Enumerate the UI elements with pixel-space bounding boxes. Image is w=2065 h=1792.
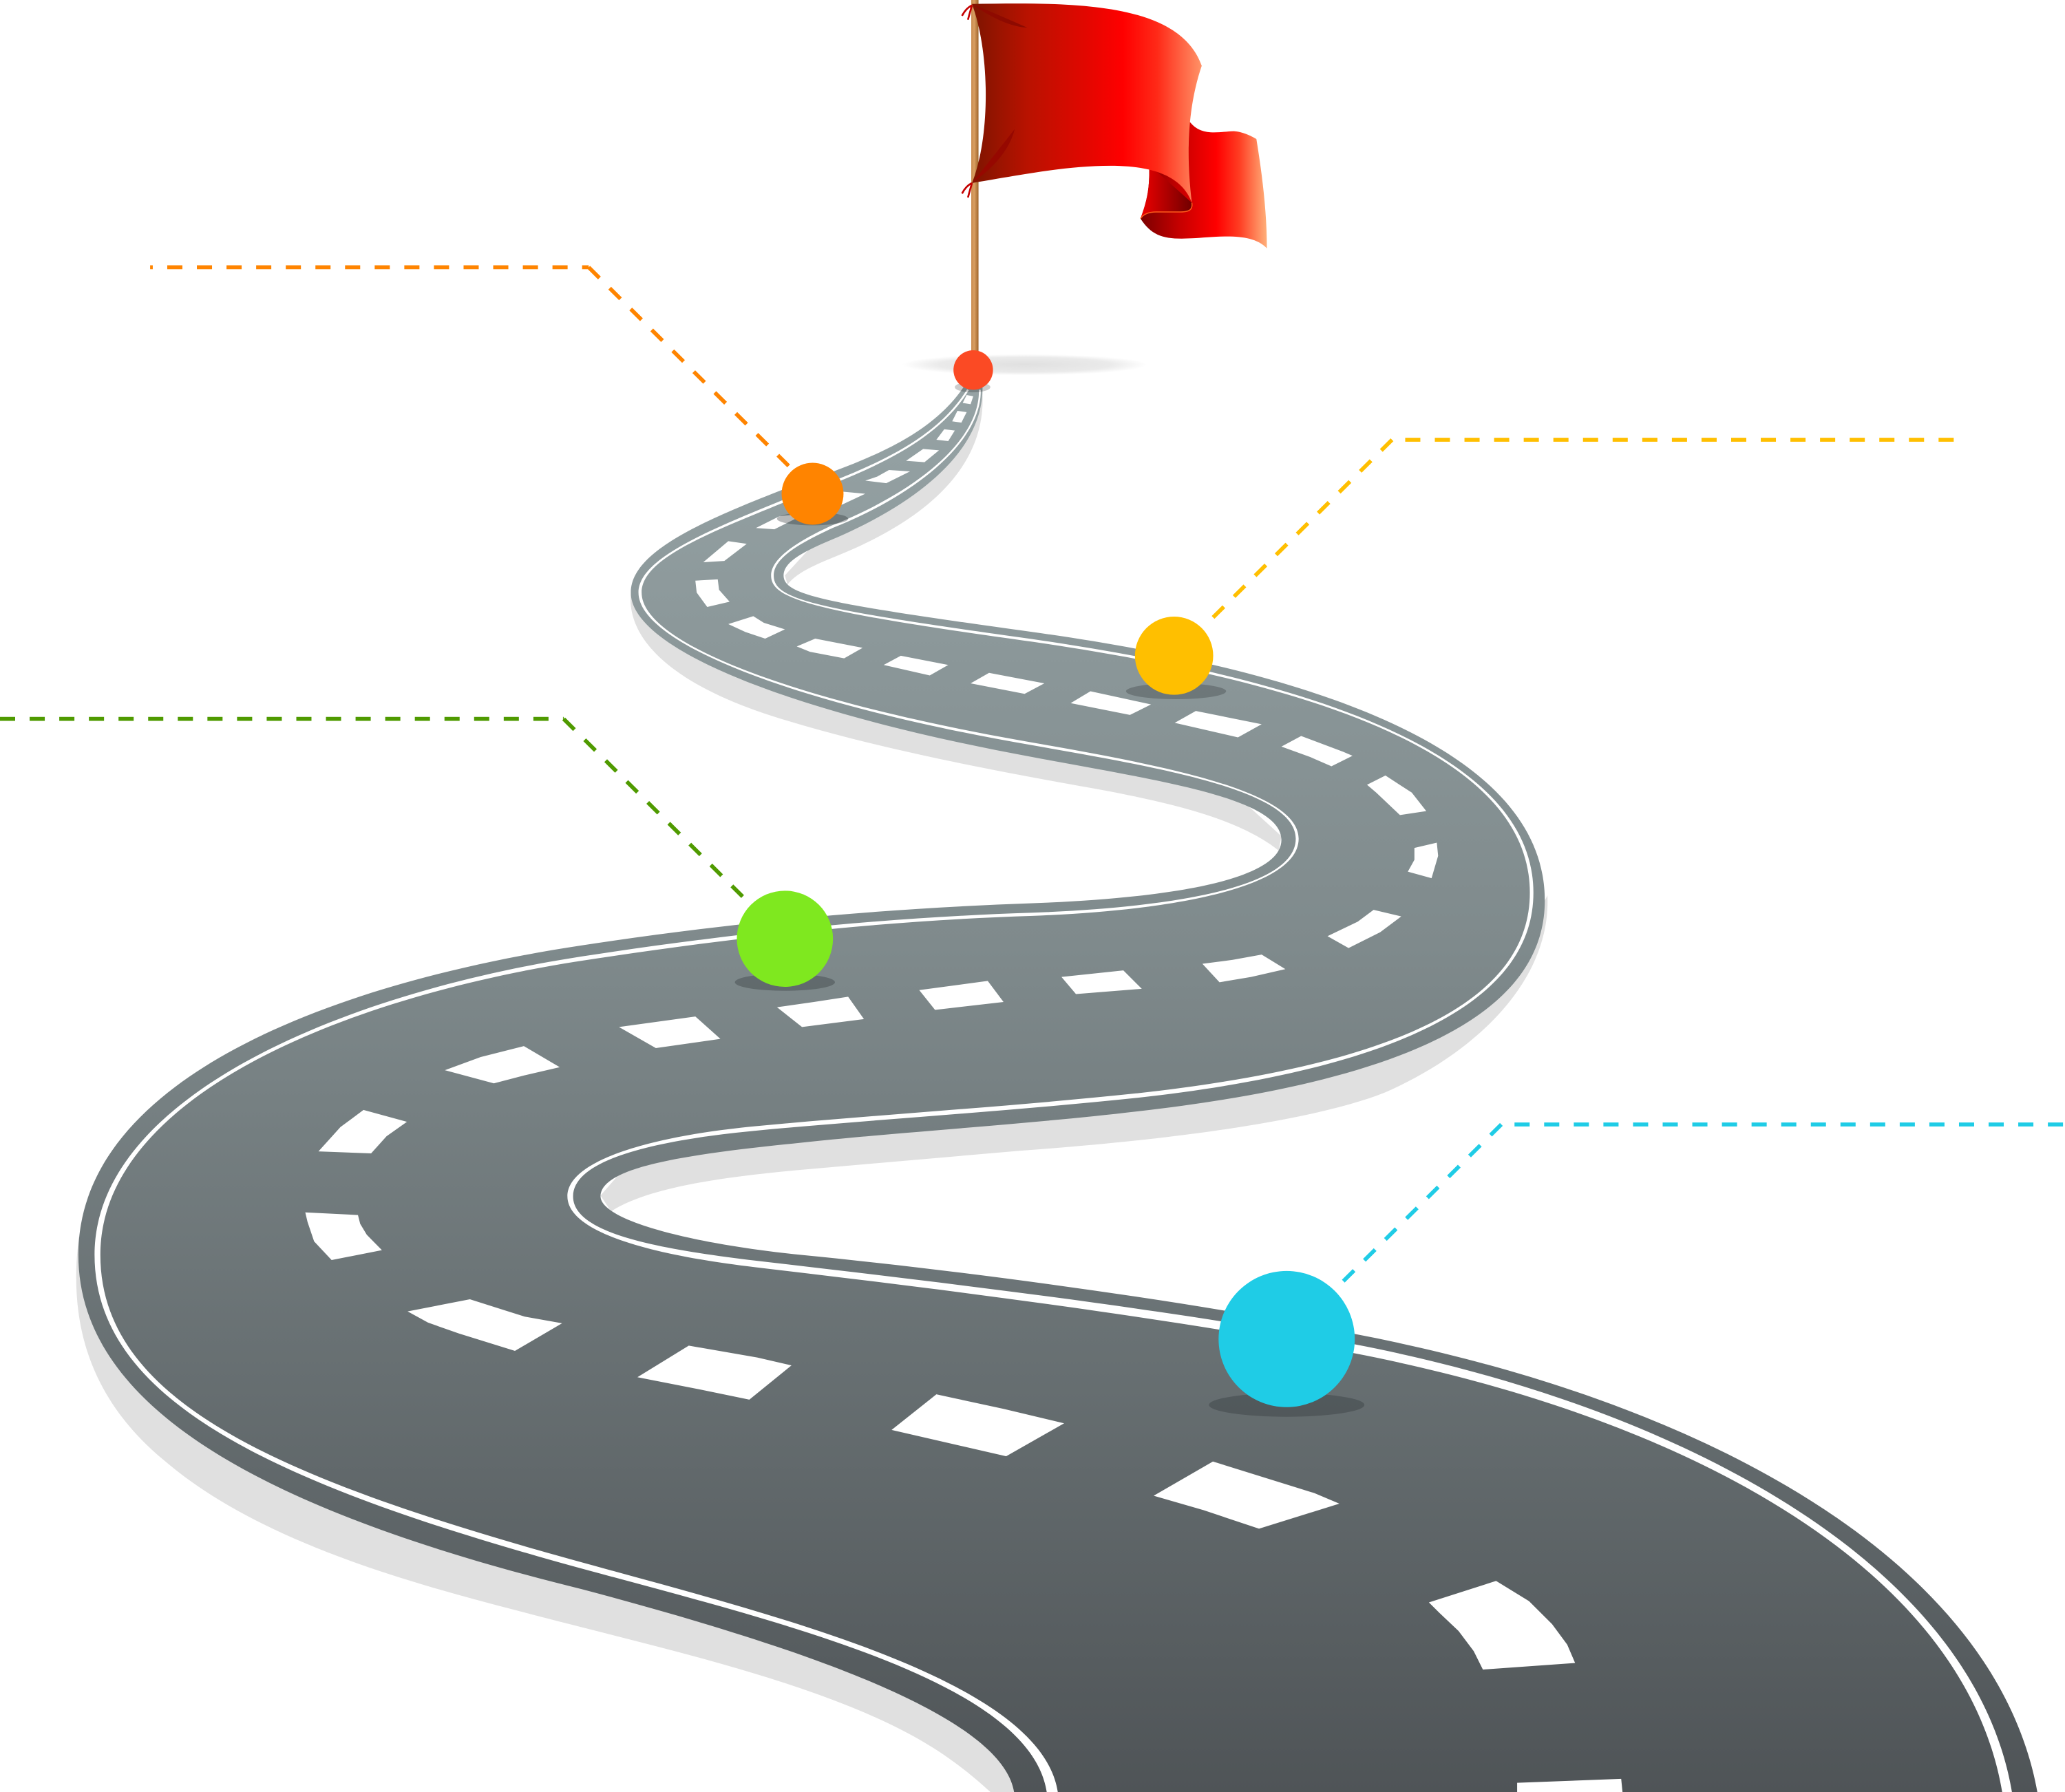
flag ground shadow xyxy=(902,354,1147,375)
milestone: orange xyxy=(777,463,848,525)
milestone: blue xyxy=(1209,1271,1364,1417)
callout line: yellow xyxy=(1205,440,1956,626)
milestone: yellow xyxy=(1126,617,1226,699)
flag pole xyxy=(971,0,979,358)
road drop shadow xyxy=(76,390,1547,1792)
flag: lower tie xyxy=(962,183,972,198)
flag: upper tie xyxy=(962,6,972,20)
flag: fold underside xyxy=(1141,164,1192,219)
road surface xyxy=(78,385,2037,1792)
flag: front panel xyxy=(972,3,1202,203)
road centre dashes xyxy=(305,395,1622,1792)
callout line: green xyxy=(0,719,747,901)
flag: upper crease xyxy=(972,4,1027,28)
flag: back panel xyxy=(1141,121,1267,248)
callout line: blue xyxy=(1338,1124,2065,1286)
callout line: orange xyxy=(150,267,793,470)
milestone: green xyxy=(735,890,835,991)
flag: lower crease xyxy=(972,129,1015,183)
road edge lines xyxy=(94,390,2012,1792)
milestone: red finish xyxy=(953,350,993,392)
flag: fold highlight xyxy=(1141,203,1192,219)
flag xyxy=(962,3,1267,248)
